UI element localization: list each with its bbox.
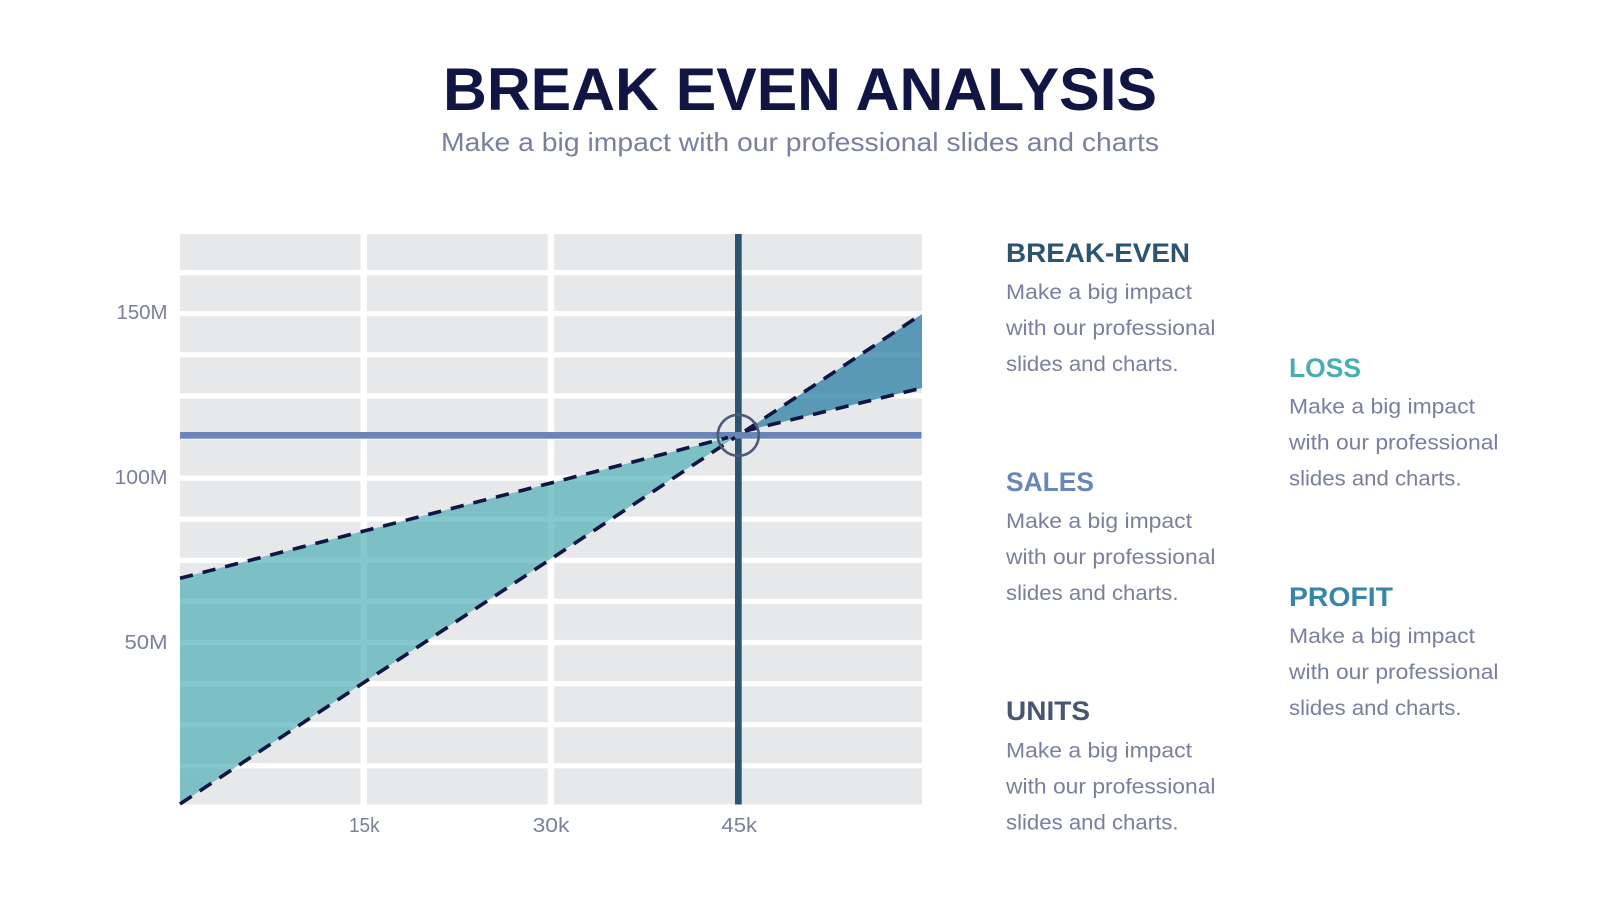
legend: break-even: Make a big impact: [1006, 281, 1192, 304]
y axis labels: 150M: [116, 301, 168, 324]
subtitle: Make a big impact with our professional slides and charts: [441, 127, 1159, 157]
legend: profit: with our professional: [1288, 661, 1498, 684]
legend: units: Make a big impact: [1006, 740, 1192, 762]
legend: break-even: with our professional: [1005, 317, 1216, 340]
legend: units: with our professional: [1005, 776, 1216, 798]
legend: sales: slides and charts.: [1006, 582, 1178, 605]
break-even marker: [718, 415, 759, 456]
y axis labels: 100M: [114, 466, 168, 489]
legend: sales: Make a big impact: [1006, 510, 1192, 533]
legend: profit: Make a big impact: [1289, 625, 1475, 648]
x axis labels: 15k: [349, 814, 380, 837]
legend: sales: [1005, 467, 1216, 605]
legend: break-even: slides and charts.: [1006, 353, 1178, 376]
legend: loss: Make a big impact: [1289, 396, 1475, 418]
x axis labels: 30k: [533, 814, 570, 837]
title: BREAK EVEN ANALYSIS: [443, 56, 1157, 123]
legend: break-even: [1005, 238, 1216, 376]
legend: loss: LOSS: [1289, 353, 1361, 383]
legend: profit: slides and charts.: [1289, 697, 1462, 720]
legend: sales: with our professional: [1005, 546, 1216, 569]
x axis labels: 45k: [721, 814, 758, 837]
x axis labels: [349, 814, 758, 837]
legend: profit: PROFIT: [1289, 582, 1394, 612]
legend: loss: [1288, 353, 1498, 490]
legend: units: slides and charts.: [1006, 812, 1178, 834]
chart: break-even: [180, 234, 922, 804]
legend: units: [1005, 696, 1216, 834]
legend: sales: SALES: [1006, 467, 1094, 497]
legend: loss: slides and charts.: [1289, 468, 1462, 490]
y axis labels: [114, 301, 168, 654]
loss wedge: [180, 435, 738, 804]
units line: [735, 234, 742, 804]
legend: profit: [1288, 582, 1498, 720]
legend: break-even: BREAK-EVEN: [1006, 238, 1190, 268]
y axis labels: 50M: [124, 631, 168, 654]
sales line: [180, 432, 922, 439]
legend: units: UNITS: [1006, 696, 1090, 726]
profit wedge: [745, 314, 922, 431]
dashed cost lines: [180, 314, 922, 804]
legend: loss: with our professional: [1288, 432, 1498, 454]
